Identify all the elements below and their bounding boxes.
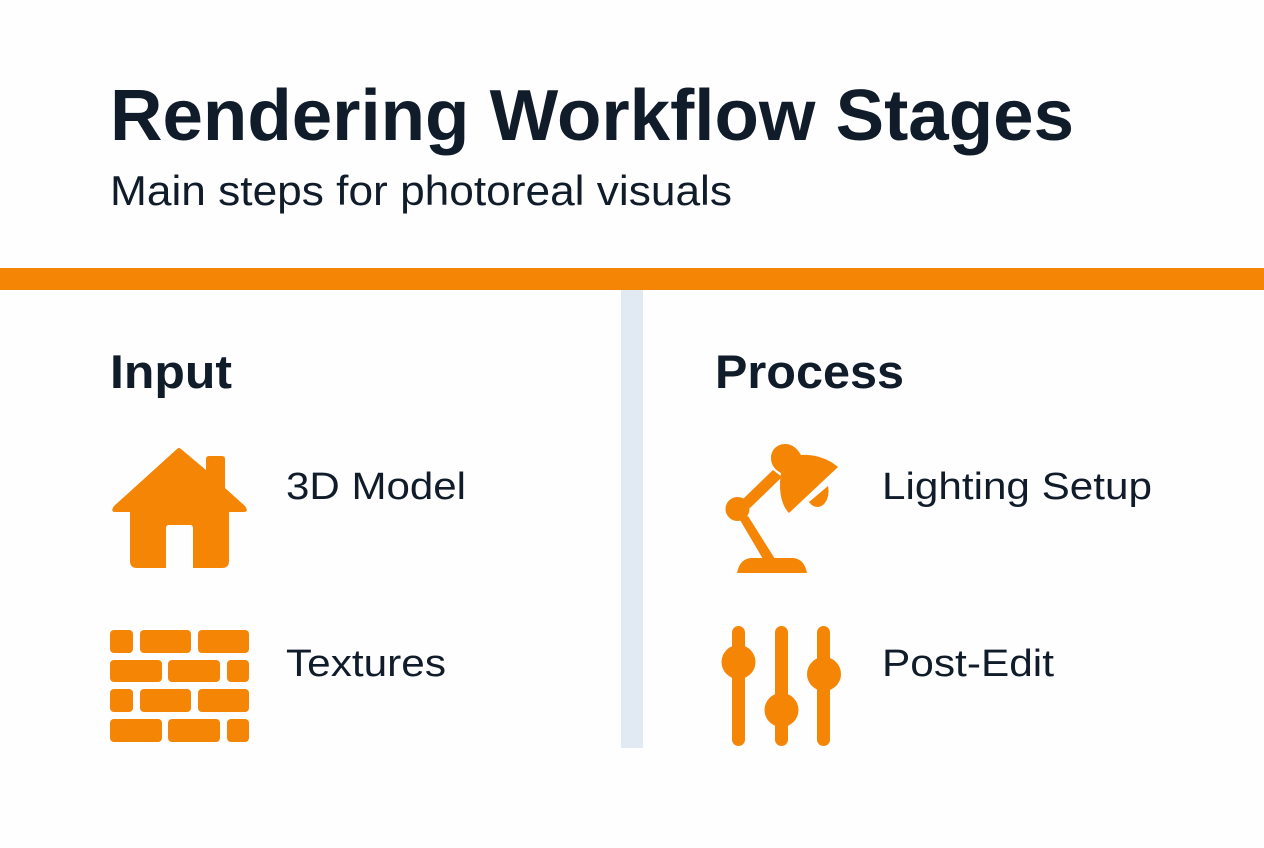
heading: process: Process (715, 345, 904, 398)
label: Lighting Setup: Lighting Setup (882, 466, 1152, 508)
label: Textures: Textures (286, 643, 446, 685)
orange header divider (0, 268, 1264, 290)
vertical column divider (621, 290, 643, 748)
label: 3D Model: 3D Model (286, 466, 466, 508)
heading: input: Input (110, 345, 232, 398)
panel: input (110, 345, 466, 742)
icon: bricks (110, 630, 249, 742)
panel: process (715, 345, 1152, 746)
subtitle: Main steps for photoreal visuals (110, 167, 732, 214)
icon: desk lamp (726, 444, 838, 573)
title: Rendering Workflow Stages (110, 76, 1074, 156)
icon: house (112, 448, 247, 568)
icon: sliders (722, 626, 841, 746)
label: Post-Edit: Post-Edit (882, 643, 1054, 685)
